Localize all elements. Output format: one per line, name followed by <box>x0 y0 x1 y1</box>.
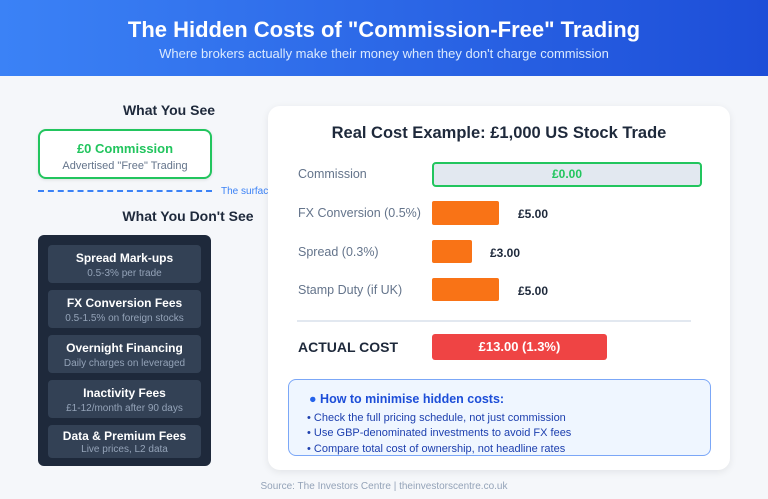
tip list: • Check the full pricing schedule, not just commission <box>307 412 566 424</box>
subtitle: Where brokers actually make their money when they don't charge commission <box>159 46 609 61</box>
heading: what you don't see: What You Don't See <box>122 208 254 224</box>
fee: overnight <box>48 335 201 373</box>
panel: real cost example: £3.00 <box>490 246 520 260</box>
fee: inactivity: Inactivity Fees <box>83 386 166 400</box>
bar: commission <box>432 162 702 187</box>
panel: hidden fees <box>38 235 211 466</box>
actual cost label: ACTUAL COST <box>298 339 398 355</box>
tip list: • Compare total cost of ownership, not headline rates <box>307 443 565 455</box>
row: commission: Commission <box>298 167 367 181</box>
fee: data: Live prices, L2 data <box>81 444 168 455</box>
panel: real cost example <box>268 106 730 470</box>
bar: commission: £0.00 <box>552 167 582 181</box>
bar: actual cost <box>432 334 607 360</box>
fee: inactivity <box>48 380 201 418</box>
fee: inactivity: £1-12/month after 90 days <box>66 403 183 414</box>
bar: fx <box>432 201 499 225</box>
box: £0 commission <box>38 129 212 179</box>
tip list: • Use GBP-denominated investments to avoid FX fees <box>307 427 571 439</box>
tip heading: ● How to minimise hidden costs: <box>309 392 504 406</box>
panel: real cost example: £5.00 <box>518 284 548 298</box>
title: The Hidden Costs of "Commission-Free" Trading <box>128 17 640 42</box>
row: fx: FX Conversion (0.5%) <box>298 206 421 220</box>
label: the surface: The surface <box>221 186 274 197</box>
fee: overnight: Daily charges on leveraged <box>64 358 185 369</box>
row: stamp: Stamp Duty (if UK) <box>298 283 402 297</box>
fee: overnight: Overnight Financing <box>66 341 183 355</box>
card title: Real Cost Example: £1,000 US Stock Trade <box>332 124 666 142</box>
heading: what you see: What You See <box>123 102 215 118</box>
tip list <box>307 412 571 455</box>
bar: actual cost: £13.00 (1.3%) <box>479 339 560 354</box>
fee: fx: FX Conversion Fees <box>67 296 182 310</box>
box: £0 commission: Advertised "Free" Trading <box>62 160 188 172</box>
fee: spread: 0.5-3% per trade <box>87 268 162 279</box>
box: £0 commission: £0 Commission <box>77 141 173 156</box>
bar: spread <box>432 240 472 263</box>
source: Source: The Investors Centre | theinvestorscentre.co.uk <box>260 481 507 492</box>
panel: real cost example: £5.00 <box>518 207 548 221</box>
tip box <box>288 379 711 456</box>
fee: data: Data & Premium Fees <box>63 429 186 443</box>
fee: data <box>48 425 201 458</box>
fee: spread <box>48 245 201 283</box>
row: spread: Spread (0.3%) <box>298 245 379 259</box>
fee: spread: Spread Mark-ups <box>76 251 173 265</box>
fee: fx <box>48 290 201 328</box>
bar: stamp <box>432 278 499 301</box>
divider: the surface <box>38 190 212 192</box>
fee: fx: 0.5-1.5% on foreign stocks <box>65 313 184 324</box>
header <box>0 0 768 76</box>
